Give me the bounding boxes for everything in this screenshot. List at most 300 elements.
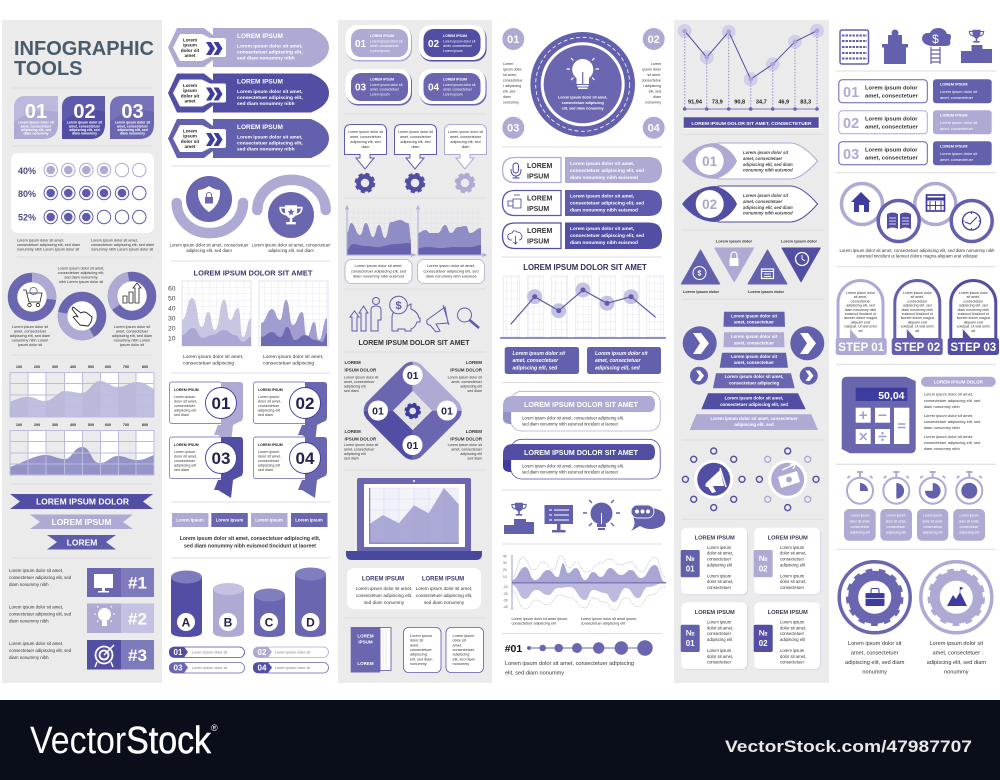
dotted line chart: 90,8 [734, 100, 745, 106]
stopwatch captions: dolor sit amet, [850, 519, 870, 523]
pyramid stack: Lorem ipsum dolor sit [731, 354, 778, 359]
text cards: nonummy [410, 662, 427, 666]
numbered card: dolor sit amet, [707, 579, 733, 584]
icon: podium trophy [504, 503, 534, 534]
step arch 03: consectetuer [963, 299, 984, 303]
step arch 01: euismod tincidunt ut [845, 312, 876, 316]
footer logo: VectorStock [30, 720, 212, 762]
diamond labels: adipiscing elit [344, 384, 366, 388]
step arch 03: adipiscing elit, sed [959, 304, 988, 308]
callout 03: 03 [212, 449, 230, 468]
icon: magnifier [458, 308, 472, 322]
icon: target [95, 645, 114, 667]
callout 04: 04 [296, 449, 315, 468]
area chart 2: 600 [105, 423, 111, 427]
eye label 02: adipiscing elit, sed diam [743, 205, 793, 210]
text: donut captions: Lorem ipsum dolor sit [12, 325, 49, 329]
numbered card: dolor sit amet, [780, 654, 806, 659]
area chart 1: 800 [142, 365, 148, 369]
diamond labels: IPSUM DOLOR [344, 436, 377, 441]
pyramid stack: Lorem ipsum dolor sit [731, 314, 778, 318]
italic text boxes: Lorem ipsum dolor sit [595, 351, 648, 357]
diamond labels: amet, consectetuer [451, 448, 483, 452]
step arch 02: euismod tincidunt ut [902, 312, 933, 316]
rounded cards 01-04: LOREM IPSUM [370, 34, 394, 38]
dotted line chart: 34,7 [756, 100, 767, 106]
side text: ipsum dolor [642, 68, 662, 72]
icon: book: LOREM [357, 661, 374, 666]
text: chart captions: Lorem ipsum dolor sit amet, [183, 354, 243, 360]
text: badge captions: adipiscing elit, sed diam [268, 248, 314, 253]
background panels [2, 20, 829, 683]
step arch 01: ad [859, 329, 862, 333]
step arch 03: Lorem ipsum dolor [959, 291, 989, 295]
icon: light bulb [566, 58, 599, 89]
diamond labels: IPSUM DOLOR [344, 367, 377, 372]
pill labels [169, 647, 328, 673]
italic text boxes: amet, consectetuer [595, 358, 642, 364]
stat rows: amet, consectetuer [865, 94, 919, 100]
step arch 01: consectetuer [850, 299, 871, 303]
stat rows: amet, consectetuer [940, 95, 974, 100]
icon: podium trophy [961, 30, 992, 63]
dotted line chart: 46,9 [778, 100, 789, 106]
icon: clock [962, 212, 980, 230]
text boxes under charts: consectetuer adipiscing elit, sed [351, 268, 406, 274]
callout 03: adipiscing elit [174, 464, 196, 468]
triangles with icons: $ [698, 270, 702, 278]
gear badge: mountain [921, 562, 992, 633]
stopwatches [847, 472, 982, 504]
icon: gear [456, 174, 474, 192]
row: cloud download: diam nonummy nibh euismod [570, 240, 638, 246]
calculator text: consectetuer adipiscing elit, sed [924, 440, 980, 445]
text boxes under charts: diam nonummy nibh euismod [426, 274, 476, 278]
growing dots timeline: Lorem ipsum dolor sit amet, consectetuer adipiscing [505, 661, 634, 667]
stopwatch captions: adipiscing elit [923, 531, 943, 535]
icon: house [851, 192, 871, 212]
step arch 03 [948, 280, 999, 355]
text cards [404, 628, 484, 672]
heading: LOREM IPSUM DOLOR SIT AMET [523, 263, 647, 272]
icon: money cloud with ladder: $ [932, 32, 939, 46]
area chart 2: 700 [123, 423, 129, 427]
icon: presentation board [94, 574, 113, 592]
stat rows: Lorem ipsum dolor sit [940, 89, 978, 94]
diamond labels: adipiscing elit [344, 452, 366, 456]
italic text boxes: adipiscing elit, sed [595, 366, 641, 372]
diamond labels: adipiscing elit [460, 452, 482, 456]
arrow callouts with gears: adipiscing elit, sed [350, 140, 381, 144]
diamond labels: adipiscing elit [460, 384, 482, 388]
text cards: elit, sed diam [410, 657, 432, 661]
step arch 01: Lorem ipsum dolor [846, 291, 876, 295]
text: below ratings: nonummy nibh Lorem ipsum dolor sit [17, 248, 80, 252]
corner number badges: 03 [507, 123, 519, 135]
calculator [842, 377, 916, 453]
chart: mountain area 1 [346, 206, 415, 256]
side text: diam [653, 95, 661, 99]
buttons row: Lorem ipsum [216, 518, 243, 522]
numbered card [754, 602, 821, 670]
top icons row [840, 28, 992, 64]
stat rows: amet, consectetuer [865, 124, 919, 130]
step arch 01: sit amet, [854, 295, 867, 299]
banner 2: LOREM IPSUM [237, 78, 283, 86]
numbered cards 01 02 03: adipiscing elit, sed [21, 128, 51, 132]
area chart 1: 600 [105, 365, 111, 369]
stat rows: Lorem ipsum dolor sit [940, 151, 978, 156]
panel: two text columns [347, 568, 481, 609]
callout 03: Lorem ipsum [174, 450, 195, 454]
row: projector: diam nonummy nibh euismod [570, 208, 638, 214]
icon: open book [887, 212, 911, 229]
icon: bulb [583, 500, 620, 530]
central bulb medallion: elit, sed diam nonummy [562, 106, 605, 110]
step arch 01: adipiscing elit, sed [846, 304, 875, 308]
numbered cards 01 02 03: diam nonummy [23, 132, 49, 136]
icon: rising bars [123, 283, 141, 303]
row: microphone: diam nonummy nibh euismod [570, 175, 638, 181]
header card light: Lorem ipsum dolor sit amet, consectetuer adipiscing elit, [522, 416, 624, 420]
icon: padlock [730, 258, 738, 266]
icon: piggy bank [392, 304, 420, 331]
diamond labels: IPSUM DOLOR [450, 436, 483, 441]
triangle labels [683, 238, 818, 294]
footer reference: VectorStock.com/47987707 [725, 737, 972, 756]
text: donut captions: nonummy nibh Lorem [114, 338, 150, 342]
banner 1: LOREM IPSUM [237, 33, 283, 40]
row: projector: IPSUM [527, 206, 549, 213]
arrow callouts with gears: Lorem ipsum dolor sit [348, 130, 383, 134]
icon: bulb [94, 606, 115, 626]
area chart 2: 800 [142, 423, 148, 427]
stat rows: LOREM IPSUM [940, 112, 967, 118]
numbered card: consectetuer [780, 659, 805, 664]
rounded cards 01-04: amet, consectetuer [370, 88, 400, 92]
text: wave captions: consectetuer adipiscing elit [512, 622, 556, 626]
hash list: #2 [128, 610, 147, 628]
stat rows [839, 79, 992, 165]
banner 1: consectetuer adipiscing elit, [237, 50, 303, 56]
corner number badges: 04 [648, 123, 661, 135]
text: chart captions [183, 354, 323, 366]
banner 3: ipsum [183, 134, 197, 138]
area chart 1: 200 [34, 365, 40, 369]
step arch 01: laoreet dolore magna [844, 316, 877, 320]
chart: mirrored wave: -30 [503, 598, 508, 602]
step arch 01 [836, 280, 887, 355]
text: chart captions: consectetuer adipiscing [263, 360, 314, 366]
callout 04: LOREM IPSUM [258, 443, 283, 447]
numbered card: LOREM IPSUM [695, 610, 735, 616]
icon: hand pointer [72, 307, 92, 326]
calculator text: diam nonummy nibh [924, 425, 960, 430]
row: cloud download [502, 222, 662, 249]
text boxes under charts: diam nonummy nibh euismod [353, 274, 404, 278]
stopwatch captions: Lorem ipsum [850, 514, 870, 518]
triangle labels: Lorem ipsum dolor [716, 238, 753, 244]
line chart with halos [500, 276, 666, 338]
stat rows: Lorem ipsum dolor sit [940, 120, 978, 125]
text: below ratings: Lorem ipsum dolor sit amet, [17, 238, 64, 242]
chart: mirrored wave [503, 554, 666, 610]
banner 3: sed diam nonummy nibh [237, 146, 295, 152]
side text: consectetue [642, 78, 661, 82]
area chart 2 [10, 423, 154, 475]
side text: nonummy [645, 100, 661, 104]
ribbon banners: LOREM IPSUM DOLOR [36, 497, 129, 507]
icon: abacus [840, 30, 868, 64]
numbered card: dolor sit amet, [707, 654, 733, 659]
banner 3 [168, 119, 329, 158]
text cards: Lorem ipsum [410, 634, 432, 638]
chart: mirrored wave: -20 [503, 592, 508, 596]
callout 02: LOREM IPSUM [258, 388, 283, 392]
step arch 01: STEP 01 [838, 342, 885, 354]
rounded cards 01-04: 01 [355, 39, 367, 50]
stat rows: Lorem ipsum dolor [865, 148, 918, 154]
diamond process: 01 [407, 440, 418, 452]
diamond process: 01 [372, 406, 384, 418]
calculator text [921, 377, 996, 451]
callout 01: consectetuer [174, 404, 196, 408]
chart: mirrored wave: 20 [503, 568, 507, 572]
text cards: adipiscing [452, 653, 469, 657]
banner 2: ipsum [183, 88, 197, 93]
chart: mirrored wave: 40 [503, 554, 507, 558]
rounded cards 01-04: 04 [428, 82, 440, 94]
callout 04: consectetuer [258, 459, 280, 463]
callout 01: adipiscing elit [174, 408, 196, 412]
text cards: nonummy [452, 662, 469, 666]
banner 2: Lorem ipsum dolor sit amet, [237, 89, 303, 95]
italic text boxes: Lorem ipsum dolor sit [512, 351, 565, 357]
laptop chart [346, 478, 482, 560]
eye label 01 [682, 143, 818, 179]
text cards: dolor sit [452, 639, 467, 643]
numbered card: dolor sit amet, [707, 625, 733, 630]
numbered card: 01 [686, 564, 695, 574]
step arch 02: Lorem ipsum dolor [903, 291, 933, 295]
side text: sit amet, [647, 73, 661, 77]
numbered cards 01 02 03: Lorem ipsum dolor sit [18, 120, 55, 124]
banner 2: Lorem [183, 83, 197, 88]
callout 02: Lorem ipsum [258, 395, 279, 399]
text boxes under charts: Lorem ipsum dolor sit amet, [354, 263, 403, 268]
text: badge captions: Lorem ipsum dolor sit amet, consectetuer [170, 242, 249, 248]
numbered cards 01 02 03: adipiscing elit, sed [69, 128, 100, 132]
text: wave captions: consectetuer adipiscing elit [581, 622, 625, 626]
numbered cards 01 02 03: diam nonummy [72, 132, 97, 136]
diamond process: 01 [441, 406, 453, 418]
panel: percent dot ratings: 80% [18, 189, 36, 199]
area chart 2: 500 [88, 423, 94, 427]
callout 04: sed diam [258, 468, 273, 472]
triangles with icons [681, 248, 820, 284]
text: donut captions: amet, consectetuer [14, 330, 47, 334]
cylinder chart: B [224, 616, 233, 630]
dotted line chart [678, 24, 824, 111]
heading: LOREM IPSUM DOLOR SIT AMET [359, 340, 470, 347]
stopwatch captions: Lorem ipsum [886, 514, 906, 518]
chart: layered area dark [259, 281, 328, 346]
step arch 03: volutpat. Ut wisi enim [957, 325, 990, 329]
icon: dollar coin [390, 296, 407, 314]
text: gear captions: nonummy [944, 670, 969, 676]
hash list: diam nonummy nibh [9, 618, 49, 624]
stat rows: LOREM IPSUM [940, 82, 967, 86]
step arch 02: laoreet dolore magna [901, 316, 934, 320]
stat rows: Lorem ipsum dolor [865, 116, 918, 122]
stat rows: LOREM IPSUM [940, 144, 967, 148]
dotted line chart: 73,9 [712, 100, 723, 106]
row: projector: Lorem ipsum dolor sit amet, [570, 194, 635, 200]
eye label 01: 01 [702, 154, 718, 169]
side text: r adipiscing [503, 84, 521, 88]
axis labels: 10 [168, 336, 176, 342]
hash list [9, 568, 154, 670]
text: chart captions: Lorem ipsum dolor sit amet, [263, 354, 323, 360]
banner 3: amet [185, 144, 196, 149]
stopwatch captions: dolor sit amet, [886, 519, 906, 523]
step arch 02: adipiscing elit, sed [903, 304, 932, 308]
icon: gear [406, 174, 424, 192]
numbered card: adipiscing elit [707, 562, 733, 568]
step arch 03: aliquam erat [964, 320, 983, 324]
header card light: LOREM IPSUM DOLOR SIT AMET [524, 400, 639, 409]
numbered card: LOREM IPSUM [768, 536, 808, 542]
text: badge captions [170, 242, 331, 253]
arrow callouts with gears: amet, consectetuer [400, 135, 432, 139]
hash list: Lorem ipsum dolor sit amet, [9, 568, 63, 573]
row: cloud download: Lorem ipsum dolor sit amet, [570, 226, 635, 232]
dotted line chart: 91,94 [688, 100, 703, 106]
rounded cards 01-04: amet, consectetuer [370, 44, 400, 48]
callout 03: dolor sit amet, [174, 454, 197, 458]
numbered card: Lorem ipsum [707, 574, 732, 578]
diamond labels: Lorem ipsum dolor sit [448, 376, 482, 380]
panel: percent dot ratings [11, 153, 154, 233]
rounded cards 01-04: LOREM IPSUM [443, 78, 467, 82]
diamond labels: sed diam [467, 456, 482, 460]
pill labels: Lorem ipsum dolor sit [192, 650, 227, 654]
text: donut captions: consectetuer adipiscing elit, [58, 271, 104, 275]
pyramid stack [690, 312, 818, 430]
banner 1: dolor sit [181, 48, 200, 53]
step arch 03: euismod tincidunt ut [958, 312, 989, 316]
numbered card: № [686, 554, 695, 563]
area chart 2: 200 [34, 423, 40, 427]
step arch 01: volutpat. Ut wisi enim [844, 325, 877, 329]
diamond labels: LOREM [344, 429, 361, 434]
icon: book: LOREM [357, 634, 374, 638]
axis labels: 50 [168, 296, 176, 302]
text: donut captions: Lorem ipsum dolor sit amet, [58, 266, 104, 270]
icon: person head [372, 298, 380, 304]
chart: mirrored wave: 10 [503, 575, 507, 579]
step arch 03: sit amet, [967, 295, 980, 299]
numbered cards 01 02 03: amet, consectetuer [21, 124, 52, 128]
calculator text: consectetuer adipiscing elit, sed [924, 398, 980, 403]
text boxes under charts [345, 260, 484, 284]
diamond labels: LOREM [466, 429, 482, 434]
row: microphone [502, 157, 662, 183]
icon: arrows and person [350, 306, 381, 331]
icon: dollar [693, 266, 706, 280]
text: gear captions [845, 641, 986, 676]
row: cloud download: LOREM [527, 228, 552, 235]
callout 04: Lorem ipsum [258, 450, 279, 454]
callout 02: adipiscing elit [258, 408, 280, 412]
numbered card: Lorem ipsum [707, 648, 732, 653]
hash list: consectetuer adipiscing elit, sed [9, 648, 72, 653]
pill labels: Lorem ipsum dolor sit [192, 666, 227, 670]
numbered card: consectetuer [707, 585, 732, 590]
panel: percent dot ratings: 40% [18, 166, 36, 176]
banner 3: Lorem ipsum dolor sit amet, [237, 134, 303, 140]
text: donut captions: nonummy nibh Lorem [12, 338, 48, 342]
text: donut captions: ipsum dolor sit [18, 343, 43, 347]
label bar [684, 117, 820, 129]
numbered card: consectetuer [780, 556, 805, 561]
diamond labels: Lorem ipsum dolor sit [448, 443, 482, 447]
panel: two text columns: Lorem ipsum dolor sit amet, [356, 586, 412, 591]
banner 2: amet [185, 98, 196, 104]
stopwatch captions [844, 509, 985, 541]
stopwatch captions: dolor sit amet, [922, 519, 943, 523]
italic text boxes: amet, consectetuer [512, 358, 559, 364]
side text: sit amet, [503, 73, 517, 77]
arrow callouts with gears: amet, consectetuer [450, 135, 482, 139]
numbered card: LOREM IPSUM [695, 536, 735, 542]
diamond labels: sed diam [344, 456, 359, 460]
icon: shield badge with arc [177, 176, 243, 233]
header card light: sed diam nonummy nibh euismod tincidunt ut laoreet [522, 422, 619, 426]
numbered card: dolor sit amet, [780, 579, 806, 584]
italic text boxes [505, 347, 661, 374]
row: projector [502, 190, 662, 216]
rounded cards 01-04: Lorem ipsum [443, 49, 463, 53]
diamond labels: sed diam [467, 389, 482, 393]
text: badge captions: adipiscing elit, sed diam [186, 248, 232, 253]
panel: two text columns: LOREM IPSUM [422, 577, 464, 583]
rounded cards 01-04: Lorem ipsum dolor sit [443, 83, 475, 87]
numbered card: consectetuer [707, 659, 732, 664]
diamond process [364, 362, 462, 460]
panel: two text columns: LOREM IPSUM [362, 577, 404, 583]
ribbon banners: LOREM IPSUM [52, 517, 111, 527]
pyramid stack: amet, consectetuer [734, 340, 774, 345]
numbered card: 01 [686, 639, 695, 648]
stat rows: Lorem ipsum dolor [865, 86, 918, 92]
side text: nonummy [503, 100, 519, 104]
banner 3: dolor sit [181, 139, 200, 144]
area chart 2: 400 [70, 423, 76, 427]
numbered card: consectetuer [707, 556, 732, 561]
icon: briefcase [866, 588, 884, 606]
triangle labels: Lorem ipsum dolor [781, 238, 818, 244]
numbered cards 01 02 03: 03 [121, 101, 144, 123]
callout 03: LOREM IPSUM [174, 443, 199, 447]
numbered card: 02 [759, 564, 768, 574]
area chart 2: 100 [16, 423, 22, 427]
header card dark: LOREM IPSUM DOLOR SIT AMET [524, 448, 639, 457]
diamond labels: sed diam [344, 389, 359, 393]
hash list: #3 [128, 646, 147, 665]
hash list: consectetuer adipiscing elit, sed [9, 575, 72, 580]
gear badge: briefcase [839, 562, 910, 633]
